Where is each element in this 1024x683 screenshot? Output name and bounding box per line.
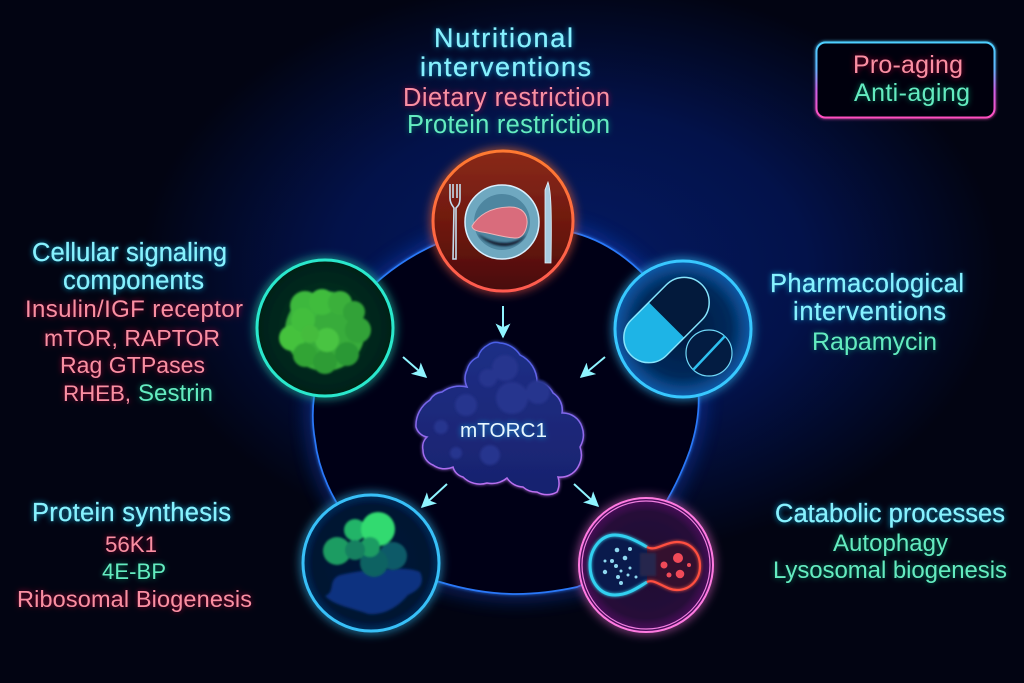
central blob: mTORC1 xyxy=(416,342,583,495)
label: cellular signaling components xyxy=(25,239,243,407)
label: protein synthesis: Ribosomal Biogenesis xyxy=(17,586,252,612)
label: cellular signaling components: Rag GTPases xyxy=(60,352,205,378)
central blob: mTORC1: mTORC1 xyxy=(460,419,547,442)
label: cellular signaling components: mTOR, RAPTOR xyxy=(44,325,220,351)
circle: nutrition plate icon xyxy=(433,151,573,291)
label: catabolic processes: Lysosomal biogenesis xyxy=(773,557,1007,584)
label: cellular signaling components: Insulin/IGF receptor xyxy=(25,296,243,323)
label: pharmacological interventions: Rapamycin xyxy=(812,328,937,356)
label: protein synthesis: Protein synthesis xyxy=(32,499,231,527)
icon: dividing vesicle xyxy=(590,535,700,595)
title block: nutritional interventions: Protein restriction xyxy=(407,111,610,139)
title block: nutritional interventions: Dietary restriction xyxy=(403,84,610,112)
title block: nutritional interventions: interventions xyxy=(420,52,591,82)
circle: green cellular cluster xyxy=(257,260,393,396)
icon: blue base xyxy=(325,568,422,614)
icon: capsule xyxy=(613,267,720,373)
title block: nutritional interventions: Nutritional xyxy=(434,23,573,53)
legend: Anti-aging xyxy=(854,79,970,107)
circle: lysosome xyxy=(579,498,713,632)
arrows into and out of mTORC1 xyxy=(403,306,605,507)
label: cellular signaling components: components xyxy=(63,267,204,295)
legend xyxy=(816,42,994,118)
icon: tablet xyxy=(686,330,732,376)
label: protein synthesis: 56K1 xyxy=(105,532,157,557)
label: catabolic processes xyxy=(773,500,1007,584)
label: protein synthesis: 4E-BP xyxy=(102,559,166,584)
label: pharmacological interventions xyxy=(770,270,964,356)
icon: fork xyxy=(450,184,460,259)
label: pharmacological interventions: Pharmacological xyxy=(770,270,964,298)
label: catabolic processes: Catabolic processes xyxy=(775,500,1005,528)
icon: knife xyxy=(545,182,551,263)
icon: plate xyxy=(465,185,539,259)
icon: green cluster xyxy=(279,289,371,374)
legend: Pro-aging xyxy=(853,51,963,79)
label: cellular signaling components: RHEB, xyxy=(63,381,131,406)
circle: capsule and tablet xyxy=(613,261,751,397)
circle: protein synthesis cluster xyxy=(303,495,439,631)
label: catabolic processes: Autophagy xyxy=(833,530,948,557)
label: pharmacological interventions: interventions xyxy=(793,298,946,326)
icon: green cluster xyxy=(323,512,407,577)
label: cellular signaling components: Sestrin xyxy=(138,380,213,407)
label: protein synthesis xyxy=(17,499,252,612)
ring connecting the five circles xyxy=(313,225,699,594)
label: cellular signaling components: Cellular signaling xyxy=(32,239,227,267)
title block: nutritional interventions xyxy=(403,23,610,139)
